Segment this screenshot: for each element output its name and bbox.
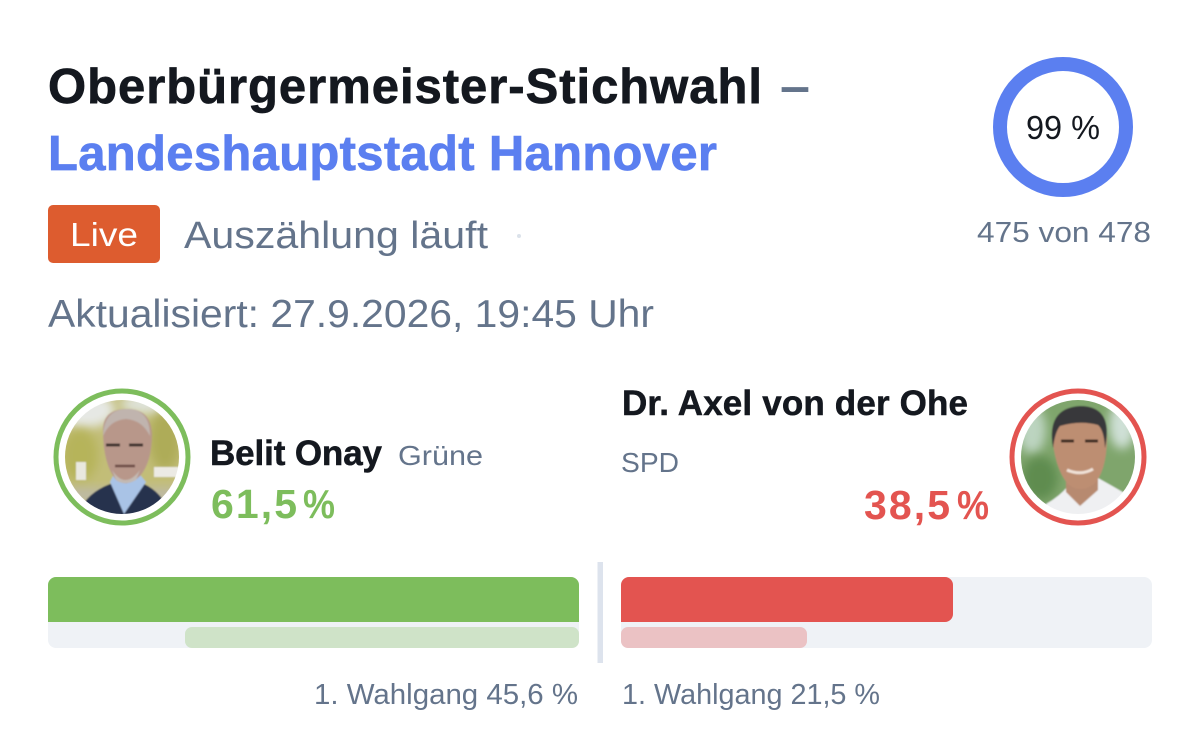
- vote share: Axel von der Ohe: %: [957, 482, 989, 528]
- title: [48, 60, 810, 181]
- title: Landeshauptstadt Hannover: [48, 127, 717, 181]
- candidate name and party: Belit Onay: [210, 434, 483, 473]
- first round label: Belit Onay: 1. Wahlgang 45,6 %: [314, 679, 578, 711]
- result bar: Belit Onay: [48, 577, 579, 648]
- candidate name and party: Axel von der Ohe: Dr. Axel von der Ohe: [622, 384, 968, 423]
- vote share: Axel von der Ohe: 38,5: [864, 482, 950, 528]
- counted precincts: 475 von 478: [977, 217, 1151, 249]
- candidate name and party: Axel von der Ohe: SPD: [621, 447, 679, 478]
- vote share: Belit Onay: [211, 481, 335, 527]
- title: Oberbürgermeister-Stichwahl: [48, 60, 762, 114]
- candidate portrait: Axel von der Ohe: [1012, 391, 1144, 523]
- vote share: Axel von der Ohe: [864, 482, 989, 528]
- candidate name and party: Axel von der Ohe: [621, 384, 968, 478]
- title: –: [780, 60, 810, 114]
- vote share: Belit Onay: %: [303, 481, 335, 527]
- candidate name and party: Belit Onay: Belit Onay: [210, 434, 383, 473]
- progress ring: 99 %: [1000, 64, 1126, 190]
- count status: Auszählung läuft: [184, 215, 488, 257]
- first round label: Axel von der Ohe: 1. Wahlgang 21,5 %: [622, 679, 880, 711]
- live badge: Live: [70, 216, 138, 253]
- center divider: [598, 562, 603, 663]
- result bar: Axel von der Ohe: [621, 577, 1152, 648]
- candidate name and party: Belit Onay: Grüne: [398, 440, 483, 471]
- candidate portrait: Belit Onay: [55, 391, 188, 523]
- vote share: Belit Onay: 61,5: [211, 481, 297, 527]
- updated timestamp: Aktualisiert: 27.9.2026, 19:45 Uhr: [48, 293, 654, 336]
- progress ring: 99 %: 99 %: [1026, 109, 1100, 146]
- live badge: [48, 205, 160, 263]
